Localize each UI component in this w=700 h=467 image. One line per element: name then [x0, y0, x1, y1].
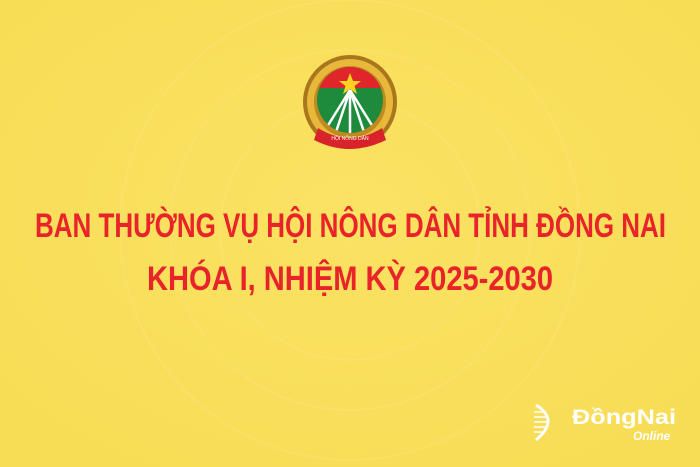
logo: DongNai Online: ĐồngNai	[572, 406, 676, 429]
banner: HỘI NÔNG DÂN	[331, 135, 369, 142]
icon: star	[339, 73, 361, 94]
emblem	[303, 55, 397, 149]
logo: DongNai Online	[534, 405, 676, 443]
title	[35, 206, 666, 298]
title: KHÓA I, NHIỆM KỲ 2025-2030	[147, 260, 553, 298]
logo: DongNai Online: Online	[633, 429, 671, 443]
